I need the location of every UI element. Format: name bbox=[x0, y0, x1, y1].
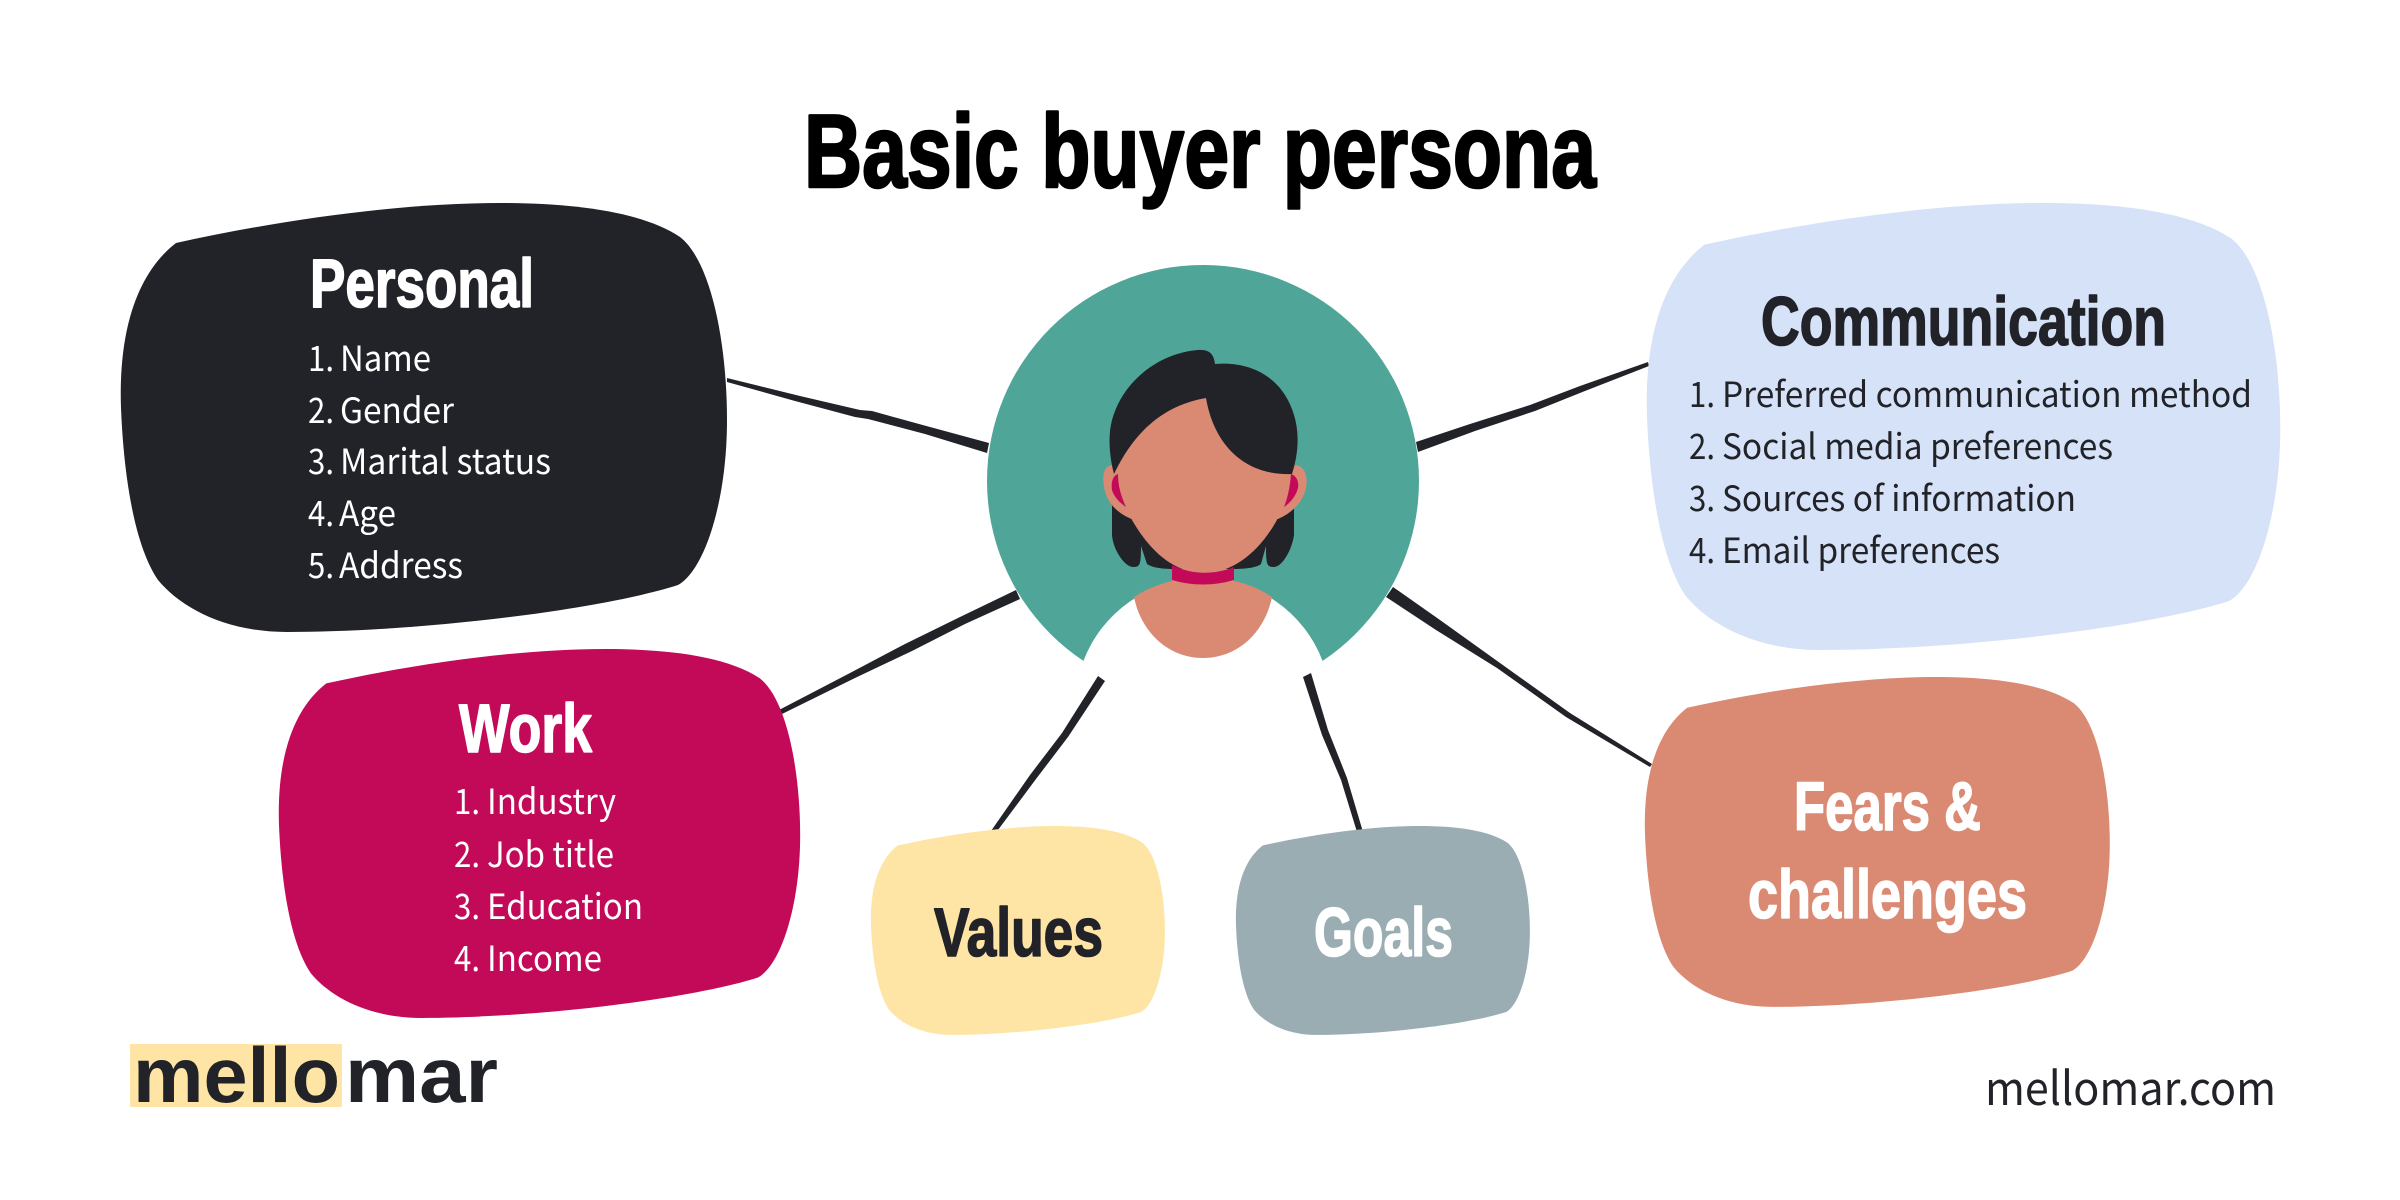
communication blob bbox=[1647, 203, 2280, 650]
logo text mello: mello bbox=[133, 1031, 340, 1119]
work list: Income bbox=[487, 931, 602, 982]
panel: work bbox=[279, 649, 800, 1018]
personal list: Age bbox=[339, 486, 396, 537]
arrow: fears connector bbox=[1386, 587, 1652, 767]
avatar earrings bbox=[1112, 474, 1298, 507]
values label: Values bbox=[934, 894, 1103, 971]
website url: mellomar.com bbox=[1985, 1053, 2276, 1119]
arrow: work connector bbox=[779, 590, 1020, 714]
communication list bbox=[1689, 367, 2252, 574]
work blob bbox=[279, 649, 800, 1018]
panel: fears and challenges bbox=[1645, 677, 2110, 1007]
work heading: Work bbox=[459, 690, 592, 767]
panel: communication bbox=[1647, 203, 2280, 650]
fears label line 2: challenges bbox=[1748, 856, 2027, 933]
icon: persona avatar bbox=[987, 265, 1419, 700]
communication list: 1. bbox=[1689, 367, 1715, 418]
logo highlight bbox=[130, 1044, 342, 1107]
panel: personal bbox=[121, 203, 727, 632]
personal list: Address bbox=[339, 538, 463, 589]
personal list: Gender bbox=[340, 383, 454, 434]
work list: 2. bbox=[454, 827, 480, 878]
personal list: 4. bbox=[308, 486, 334, 537]
communication list: 3. bbox=[1689, 471, 1715, 522]
logo text mar: mar bbox=[345, 1031, 498, 1119]
work list: Education bbox=[487, 879, 643, 930]
work list: Job title bbox=[487, 827, 614, 878]
goals label: Goals bbox=[1314, 894, 1453, 971]
arrow: values connector bbox=[991, 676, 1105, 834]
avatar white shoulders bbox=[1083, 579, 1323, 700]
title: Basic buyer persona bbox=[804, 94, 1597, 210]
arrow: goals connector bbox=[1303, 673, 1363, 832]
communication list: Email preferences bbox=[1722, 523, 2000, 574]
goals blob bbox=[1236, 826, 1530, 1035]
personal list: 2. bbox=[308, 383, 334, 434]
avatar lower hair bbox=[1112, 490, 1294, 569]
arrow: personal connector bbox=[727, 378, 989, 453]
avatar teal circle bbox=[987, 265, 1419, 697]
avatar ears bbox=[1103, 465, 1307, 520]
communication heading: Communication bbox=[1761, 283, 2166, 360]
avatar face bbox=[1113, 395, 1294, 573]
avatar neck and chest bbox=[1134, 555, 1272, 658]
fears label line 1: Fears & bbox=[1794, 768, 1981, 845]
personal list: 3. bbox=[308, 434, 334, 485]
personal list: 5. bbox=[308, 538, 334, 589]
personal list: 1. bbox=[308, 331, 334, 382]
communication list: 4. bbox=[1689, 523, 1715, 574]
personal list bbox=[308, 331, 551, 589]
personal heading: Personal bbox=[310, 245, 534, 322]
personal blob bbox=[121, 203, 727, 632]
fears blob bbox=[1645, 677, 2110, 1007]
avatar choker bbox=[1172, 565, 1234, 584]
work list bbox=[454, 774, 643, 982]
work list: Industry bbox=[487, 774, 616, 825]
communication list: Preferred communication method bbox=[1722, 367, 2252, 418]
personal list: Marital status bbox=[340, 434, 551, 485]
arrow: communication connector bbox=[1416, 362, 1649, 452]
panel: values bbox=[871, 826, 1165, 1035]
personal list: Name bbox=[340, 331, 431, 382]
work list: 4. bbox=[454, 931, 480, 982]
avatar hair bbox=[1110, 350, 1298, 474]
communication list: 2. bbox=[1689, 419, 1715, 470]
work list: 3. bbox=[454, 879, 480, 930]
logo: mellomar bbox=[130, 1031, 498, 1119]
panel: goals bbox=[1236, 826, 1530, 1035]
work list: 1. bbox=[454, 774, 480, 825]
communication list: Sources of information bbox=[1722, 471, 2076, 522]
communication list: Social media preferences bbox=[1722, 419, 2113, 470]
values blob bbox=[871, 826, 1165, 1035]
